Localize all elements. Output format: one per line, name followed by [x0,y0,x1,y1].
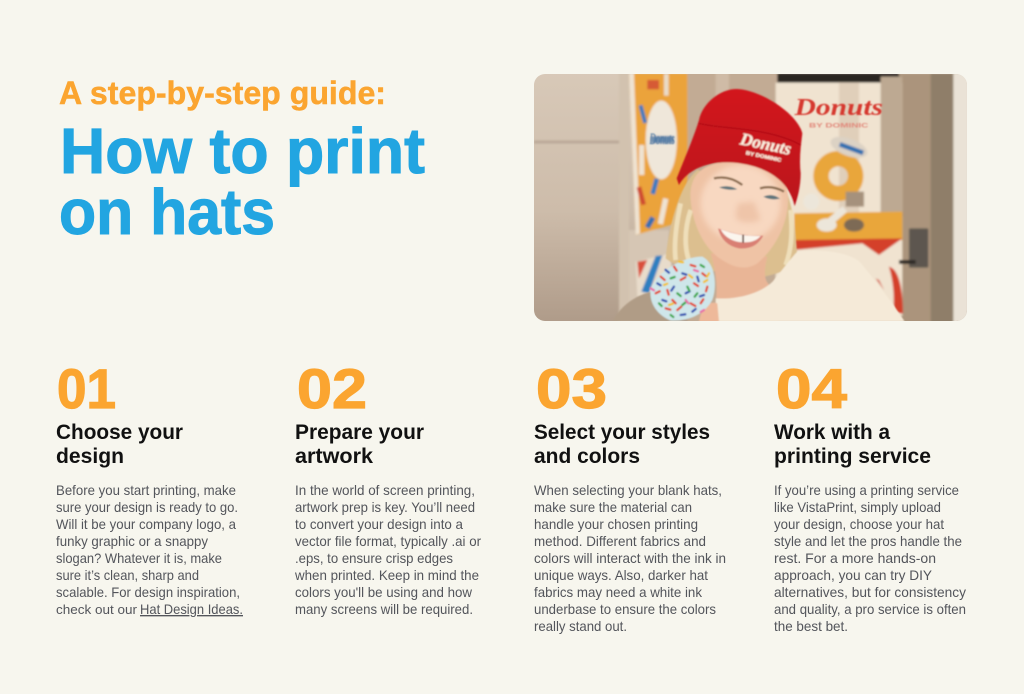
step 1 [56,357,243,617]
step 1 heading: design [56,444,124,468]
eyebrow heading: A step-by-step guide: [59,75,386,111]
step 1 body [56,483,243,617]
step 3 [534,357,726,634]
step 2 body: .eps, to ensure crisp edges [295,551,453,566]
step 1 body: funky graphic or a snappy [56,534,208,549]
woman [612,89,905,322]
main title: on hats [59,176,275,248]
step 2 body: many screens will be required. [295,602,473,617]
step 4 heading: printing service [774,444,931,468]
step 1 body: sure it’s clean, sharp and [56,568,199,583]
step 3 body: really stand out. [534,619,627,634]
step 4 body: and quality, a pro service is often [774,602,966,617]
step 1 body: Before you start printing, make [56,483,236,498]
step 2 number: 02 [297,357,367,420]
step 1 body: Hat Design Ideas. [140,602,243,617]
step 4 body: your design, choose your hat [774,517,944,532]
step 1 body: sure your design is ready to go. [56,500,238,515]
step 3 body: handle your chosen printing [534,517,698,532]
step 3 body: When selecting your blank hats, [534,483,722,498]
lower poster [636,253,674,297]
step 4 body [774,483,966,634]
step 3 body [534,483,726,634]
step 3 body: unique ways. Also, darker hat [534,568,708,583]
step 2 [294,357,481,617]
step 4 [774,357,966,634]
step 3 heading: and colors [534,444,640,468]
step 2 body: In the world of screen printing, [295,483,475,498]
title block [59,75,425,248]
sleeve [612,291,671,322]
face [691,162,788,268]
poster lettering: BY DOMINIC [809,122,869,129]
beanie logo: Donuts [738,129,793,159]
step 4 body: alternatives, but for consistency [774,585,966,600]
step 4 body: If you’re using a printing service [774,483,959,498]
step 2 body: artwork prep is key. You’ll need [295,500,475,515]
step 1 body: scalable. For design inspiration, [56,585,240,600]
donut mascot [821,159,856,193]
step 3 body: fabrics may need a white ink [534,585,702,600]
step 4 body: the best bet. [774,619,848,634]
step 4 body: like VistaPrint, simply upload [774,500,941,515]
right poster [899,73,956,323]
step 2 body: to convert your design into a [295,517,463,532]
main title: How to print [60,115,425,187]
step 1 body: Will it be your company logo, a [56,517,236,532]
step 2 heading: artwork [295,444,373,468]
poster lettering: Donuts [649,131,675,148]
step 4 number: 04 [776,357,847,420]
photo: woman in red beanie holding a donut [534,70,968,327]
poster lettering [648,98,883,145]
eyes and brows [714,177,742,185]
step 3 heading [534,420,710,468]
step 3 heading: Select your styles [534,420,710,444]
step 1 body: check out our [56,602,138,617]
beanie logo: BY DOMINIC [745,150,782,164]
main title [59,115,425,248]
step 1 number: 01 [57,357,116,420]
step 4 heading: Work with a [774,420,891,444]
step 3 body: make sure the material can [534,500,692,515]
step 2 body [294,483,481,617]
step 2 body: when printed. Keep in mind the [294,568,479,583]
step 4 body: approach, you can try DIY [774,568,932,583]
door handle [909,228,928,268]
step 1 heading [56,420,184,468]
step 1 heading: Choose your [56,420,184,444]
mouth [718,228,763,249]
step 3 body: colors will interact with the ink in [534,551,726,566]
step 1 body: slogan? Whatever it is, make [56,551,222,566]
hand [699,303,719,322]
step 3 body: underbase to ensure the colors [534,602,716,617]
shirt [716,250,905,322]
step 3 body: method. Different fabrics and [534,534,706,549]
step 2 heading [295,420,425,468]
step 2 body: colors you'll be using and how [295,585,472,600]
neck [712,254,769,299]
step 2 heading: Prepare your [295,420,425,444]
step 2 body: vector file format, typically .ai or [295,534,481,549]
poster lettering: Donuts [793,95,883,121]
red beanie [677,89,802,206]
left poster [629,73,688,235]
hair [666,170,797,277]
step 4 body: style and let the pros handle the [774,534,962,549]
step 4 heading [774,420,931,468]
donut [650,257,715,321]
step 4 body: rest. For a more hands-on [774,551,936,566]
step 3 number: 03 [536,357,607,420]
